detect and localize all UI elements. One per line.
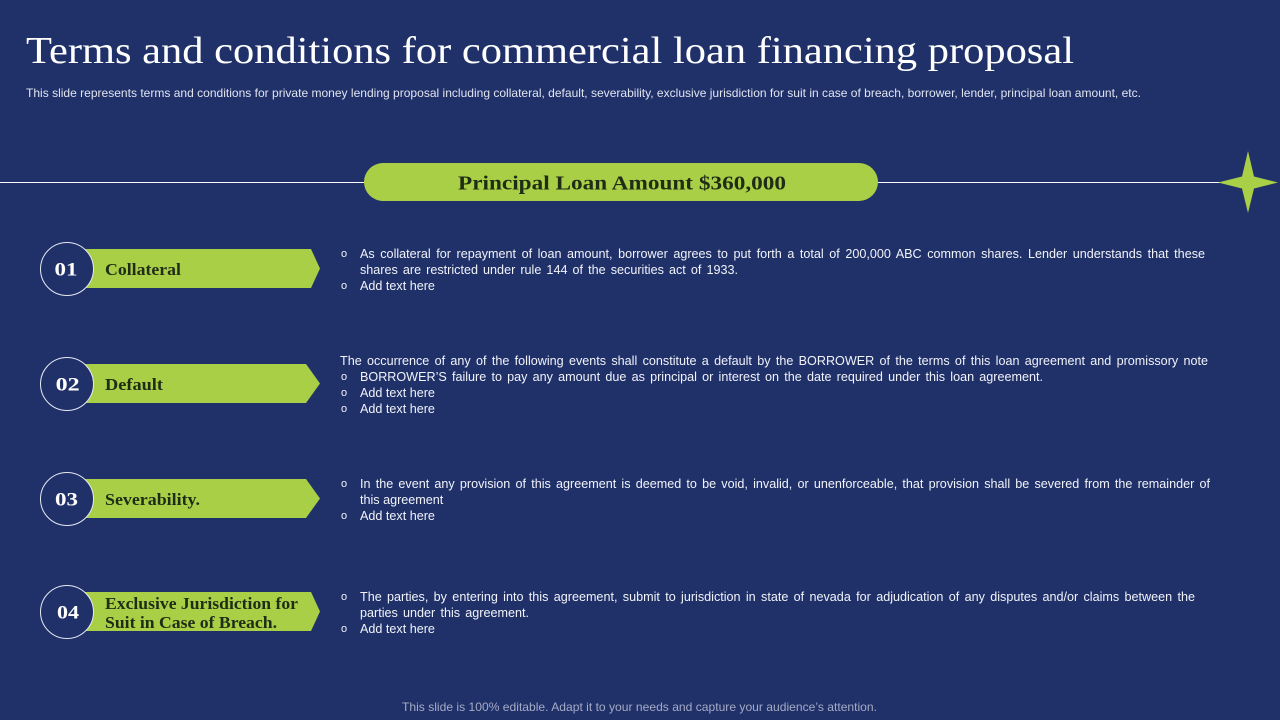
- item 04 text: Add text here: [360, 622, 435, 636]
- item 03 label: Severability: Severability.: [105, 490, 200, 509]
- item 03 text: In the event any provision of this agreement is deemed to be void, invalid, or unenforceable, that provision shall be severed from the remainder of: [360, 477, 1210, 491]
- item 01 text: o: [341, 280, 347, 292]
- item 04 label: Exclusive Jurisdiction: [40, 585, 320, 639]
- item 03 text: o: [341, 510, 347, 522]
- item 04 text: [341, 590, 1195, 636]
- item 02 text: o: [341, 371, 347, 383]
- item 04 label: Exclusive Jurisdiction: 04: [57, 602, 80, 624]
- icon: four-point star: [1218, 151, 1278, 213]
- item 01 label: Collateral: [40, 242, 320, 296]
- item 03 label: Severability: 03: [55, 490, 78, 510]
- item 01 text: As collateral for repayment of loan amount, borrower agrees to put forth a total of 200,000 ABC common shares. Lender understands that these: [360, 247, 1205, 261]
- banner text: Principal Loan Amount $360,000: [458, 172, 786, 194]
- item 02 text: The occurrence of any of the following events shall constitute a default by the BORROWER of the terms of this loan agreement and promissory note: [340, 354, 1208, 368]
- item 04 text: The parties, by entering into this agreement, submit to jurisdiction in state of nevada for adjudication of any disputes and/or claims between the: [360, 590, 1195, 604]
- item 03 label: Severability: [40, 472, 320, 526]
- item 02 text: Add text here: [360, 386, 435, 400]
- item 01 text: [341, 247, 1205, 293]
- item 01 text: shares are restricted under rule 144 of the securities act of 1933.: [360, 263, 738, 277]
- item 03 text: this agreement: [360, 493, 443, 507]
- item 04 label: Exclusive Jurisdiction: Exclusive Jurisdiction for: [105, 594, 298, 613]
- item 04 label: Exclusive Jurisdiction: Suit in Case of Breach.: [105, 613, 277, 632]
- principal loan amount banner: [0, 151, 1278, 213]
- item 04 text: o: [341, 591, 347, 603]
- item 02 text: Add text here: [360, 402, 435, 416]
- item 02 label: Default: 02: [56, 374, 80, 396]
- item 01 label: Collateral: 01: [54, 260, 78, 280]
- item 03 text: [341, 477, 1210, 523]
- title: Terms and conditions for commercial loan financing proposal: [26, 30, 1074, 72]
- item 02 label: Default: [40, 357, 320, 411]
- item 02 text: o: [341, 403, 347, 415]
- item 02 label: Default: Default: [105, 375, 163, 394]
- item 03 text: o: [341, 478, 347, 490]
- item 01 text: Add text here: [360, 279, 435, 293]
- item 02 text: o: [341, 387, 347, 399]
- item 02 text: BORROWER’S failure to pay any amount due as principal or interest on the date required under this loan agreement.: [360, 370, 1043, 384]
- item 03 text: Add text here: [360, 509, 435, 523]
- banner pill: [364, 163, 878, 201]
- item 04 text: parties under this agreement.: [360, 606, 529, 620]
- footer note: This slide is 100% editable. Adapt it to your needs and capture your audience’s attention.: [402, 700, 877, 714]
- item 04 text: o: [341, 623, 347, 635]
- item 02 text: [340, 354, 1208, 416]
- item 01 text: o: [341, 248, 347, 260]
- subtitle: This slide represents terms and conditions for private money lending proposal including collateral, default, severability, exclusive jurisdiction for suit in case of breach, borrower, lender, principal loan amount, etc.: [26, 86, 1141, 100]
- item 01 label: Collateral: Collateral: [105, 260, 181, 279]
